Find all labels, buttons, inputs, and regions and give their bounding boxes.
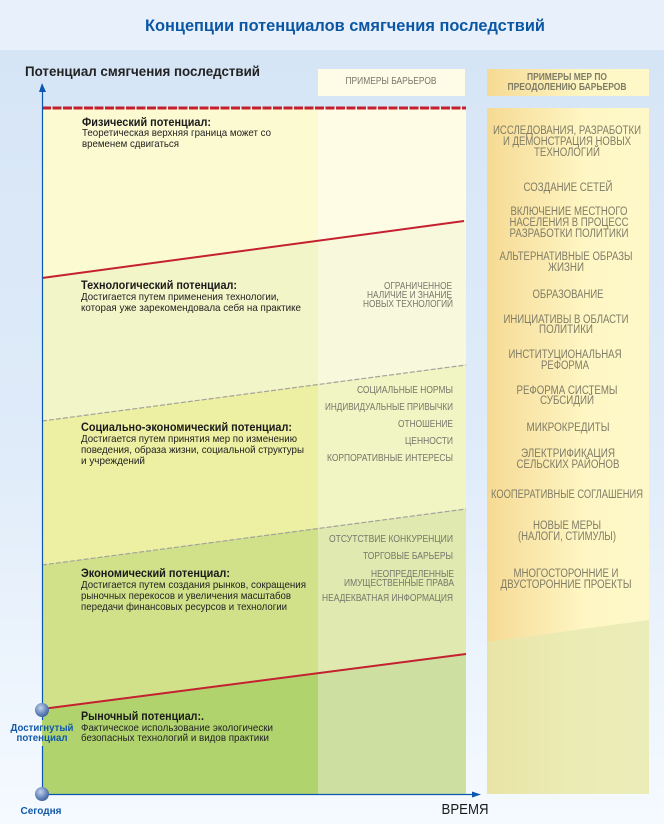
list: measures: МИКРОКРЕДИТЫ (526, 422, 610, 434)
marker: achieved potential (10, 703, 74, 744)
list: measures (491, 125, 643, 591)
barriers: socio-economic: ЦЕННОСТИ (405, 436, 453, 447)
text: socio-economic potential: и учреждений (81, 455, 145, 467)
list: measures: ОБРАЗОВАНИЕ (532, 289, 604, 301)
barriers: socio-economic: СОЦИАЛЬНЫЕ НОРМЫ (357, 385, 453, 396)
barriers: technological: НОВЫХ ТЕХНОЛОГИЙ (363, 297, 453, 310)
list: measures: СЕЛЬСКИХ РАЙОНОВ (516, 458, 620, 471)
text: physical potential: Теоретическая верхняя граница может со (82, 127, 271, 139)
barriers: socio-economic: ОТНОШЕНИЕ (398, 419, 453, 430)
header: examples of barriers (318, 69, 465, 96)
chart: potential bands (42, 108, 466, 794)
list: measures: СУБСИДИЙ (540, 394, 594, 407)
text: technological potential: Технологический потенциал: (81, 280, 237, 292)
list: measures: НОВЫЕ МЕРЫ (533, 520, 601, 532)
text: physical potential (82, 117, 271, 150)
boundary: socio-economic potential (42, 365, 466, 421)
list: measures: РЕФОРМА (541, 360, 589, 372)
barriers: economic: ТОРГОВЫЕ БАРЬЕРЫ (363, 551, 453, 562)
marker: today: Сегодня (20, 805, 62, 817)
title banner: Концепции потенциалов смягчения последствий (145, 16, 545, 35)
text: economic potential: Достигается путем создания рынков, сокращения (81, 579, 306, 591)
list: measures: ЖИЗНИ (548, 262, 584, 274)
text: technological potential: Достигается путем применения технологии, (81, 291, 279, 303)
barriers: socio-economic (325, 385, 453, 464)
barriers: technological (363, 281, 453, 310)
marker: today (20, 787, 62, 817)
text: socio-economic potential: Достигается путем принятия мер по изменению (81, 433, 297, 445)
text: economic potential: рыночных перекосов и увеличения масштабов (81, 590, 291, 602)
list: measures: (НАЛОГИ, СТИМУЛЫ) (518, 531, 616, 543)
text: market potential: Фактическое использование экологически (81, 722, 273, 734)
list: measures: РЕФОРМА СИСТЕМЫ (516, 385, 618, 397)
x axis arrow (42, 792, 481, 798)
text: physical potential: Физический потенциал: (82, 117, 211, 129)
header: examples of measures: ПРИМЕРЫ МЕР ПО (527, 72, 607, 83)
text: market potential (81, 711, 273, 744)
text: economic potential (81, 568, 306, 613)
text: technological potential (81, 280, 301, 314)
barriers: economic: НЕАДЕКВАТНАЯ ИНФОРМАЦИЯ (322, 593, 453, 604)
list: measures: ТЕХНОЛОГИЙ (534, 146, 600, 159)
text: physical potential: временем сдвигаться (82, 138, 179, 150)
barriers: economic: ОТСУТСТВИЕ КОНКУРЕНЦИИ (329, 534, 453, 545)
list: measures: ВКЛЮЧЕНИЕ МЕСТНОГО (510, 206, 628, 218)
text: market potential: Рыночный потенциал:. (81, 711, 204, 723)
list: measures: ДВУСТОРОННИЕ ПРОЕКТЫ (500, 579, 632, 591)
barriers: economic: НЕОПРЕДЕЛЕННЫЕ (371, 569, 454, 580)
boundary: economic potential (42, 509, 466, 565)
text: market potential: безопасных технологий и видов практики (81, 732, 269, 744)
list: measures: ИНСТИТУЦИОНАЛЬНАЯ (508, 349, 622, 361)
list: measures: СОЗДАНИЕ СЕТЕЙ (524, 181, 612, 194)
boundary: technological potential (42, 221, 464, 278)
boundary: market potential (42, 654, 466, 709)
header: examples of barriers: ПРИМЕРЫ БАРЬЕРОВ (346, 76, 437, 87)
list: measures: АЛЬТЕРНАТИВНЫЕ ОБРАЗЫ (500, 251, 632, 263)
list: measures: НАСЕЛЕНИЯ В ПРОЦЕСС (510, 217, 628, 229)
x axis label: ВРЕМЯ (442, 801, 488, 818)
y axis arrow (39, 83, 46, 794)
title banner (0, 0, 664, 50)
text: socio-economic potential: Социально-экономический потенциал: (81, 422, 292, 434)
header: examples of measures: ПРЕОДОЛЕНИЮ БАРЬЕРОВ (508, 82, 626, 93)
text: socio-economic potential (81, 422, 304, 467)
barriers: technological: НАЛИЧИЕ И ЗНАНИЕ (367, 290, 452, 301)
marker: achieved potential: Достигнутый (10, 722, 74, 734)
list: measures: ПОЛИТИКИ (539, 324, 593, 336)
barriers: socio-economic: КОРПОРАТИВНЫЕ ИНТЕРЕСЫ (327, 453, 453, 464)
barriers: socio-economic: ИНДИВИДУАЛЬНЫЕ ПРИВЫЧКИ (325, 402, 453, 413)
header: examples of measures (487, 69, 649, 96)
barriers: economic: ИМУЩЕСТВЕННЫЕ ПРАВА (344, 578, 454, 589)
list: measures: РАЗРАБОТКИ ПОЛИТИКИ (510, 228, 628, 240)
y axis title: Потенциал смягчения последствий (25, 63, 260, 79)
text: socio-economic potential: поведения, образа жизни, социальной структуры (81, 444, 304, 456)
list: measures: ЭЛЕКТРИФИКАЦИЯ (521, 448, 615, 460)
text: economic potential: Экономический потенциал: (81, 568, 230, 580)
text: economic potential: передачи финансовых ресурсов и технологии (81, 601, 287, 613)
text: technological potential: которая уже зарекомендовала себя на практике (81, 302, 301, 314)
list: measures: ИНИЦИАТИВЫ В ОБЛАСТИ (504, 314, 628, 326)
boundary: physical potential (42, 106, 466, 110)
marker: achieved potential: потенциал (16, 732, 68, 744)
list: measures: МНОГОСТОРОННИЕ И (514, 568, 618, 580)
panel: measures (487, 108, 649, 794)
list: measures: ИССЛЕДОВАНИЯ, РАЗРАБОТКИ (493, 125, 641, 137)
barriers: economic (322, 534, 454, 604)
barriers: technological: ОГРАНИЧЕННОЕ (384, 281, 452, 292)
list: measures: И ДЕМОНСТРАЦИЯ НОВЫХ (503, 136, 631, 148)
